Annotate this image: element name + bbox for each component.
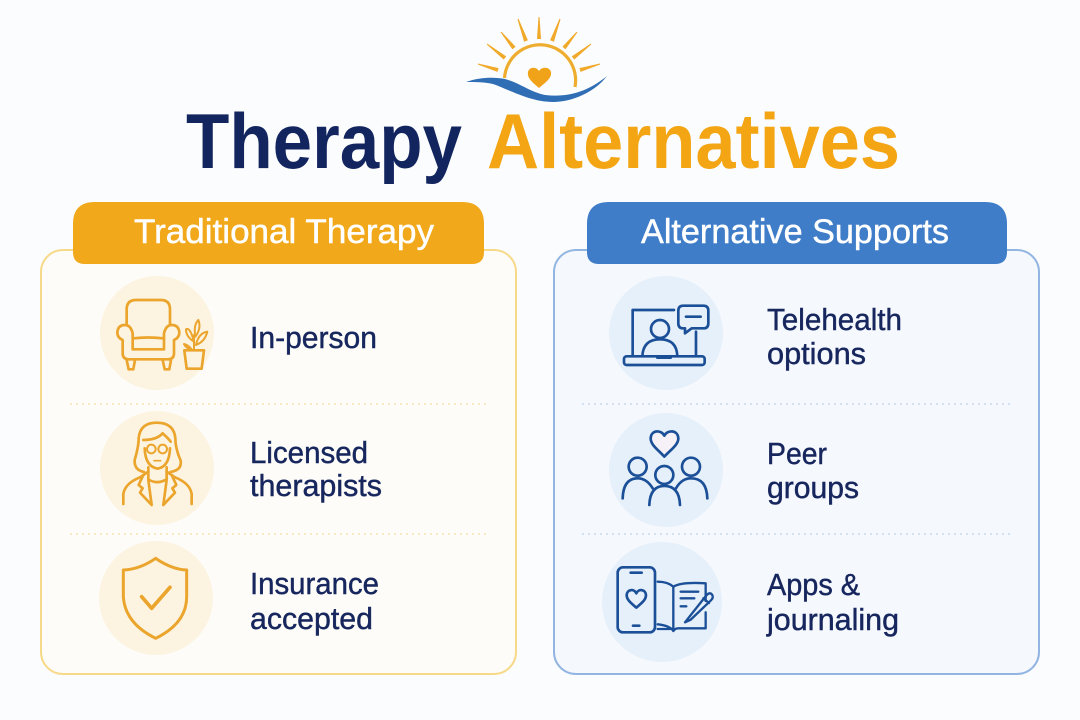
panel: alternative supports (554, 202, 1039, 674)
row: apps and journaling (602, 542, 899, 662)
row: licensed therapists (100, 411, 382, 525)
icon: phone and journal (618, 567, 713, 632)
icon: group with heart (623, 431, 707, 505)
row: in-person (100, 276, 377, 390)
panel header (73, 202, 484, 264)
row: telehealth options (609, 276, 902, 390)
icon: armchair and plant (117, 300, 207, 369)
icon: therapist (123, 423, 192, 505)
row: in-person: In-person (250, 320, 377, 355)
title: Alternatives (487, 97, 900, 185)
row: licensed therapists: Licensed (250, 435, 368, 470)
row: insurance accepted (99, 541, 379, 655)
panel background (554, 250, 1039, 674)
icon: laptop with video call (624, 306, 708, 365)
panel header: Alternative Supports (641, 213, 949, 251)
logo: sun, heart and wave (466, 17, 607, 102)
row: insurance accepted: accepted (250, 601, 373, 636)
title: Therapy (186, 97, 462, 185)
title (186, 97, 900, 185)
row: telehealth options: options (767, 336, 866, 371)
row: peer groups: groups (767, 470, 859, 505)
icon: shield with check (123, 558, 187, 638)
row: licensed therapists: therapists (250, 468, 382, 503)
panel header: Traditional Therapy (134, 213, 434, 251)
row: peer groups (609, 413, 859, 527)
row: telehealth options: Telehealth (767, 302, 902, 337)
row: apps and journaling: journaling (766, 602, 899, 637)
panel: traditional therapy (41, 202, 516, 674)
panel header (587, 202, 1007, 264)
row: apps and journaling: Apps & (767, 567, 860, 602)
row: peer groups: Peer (767, 436, 827, 471)
panel background (41, 250, 516, 674)
row: insurance accepted: Insurance (250, 566, 379, 601)
